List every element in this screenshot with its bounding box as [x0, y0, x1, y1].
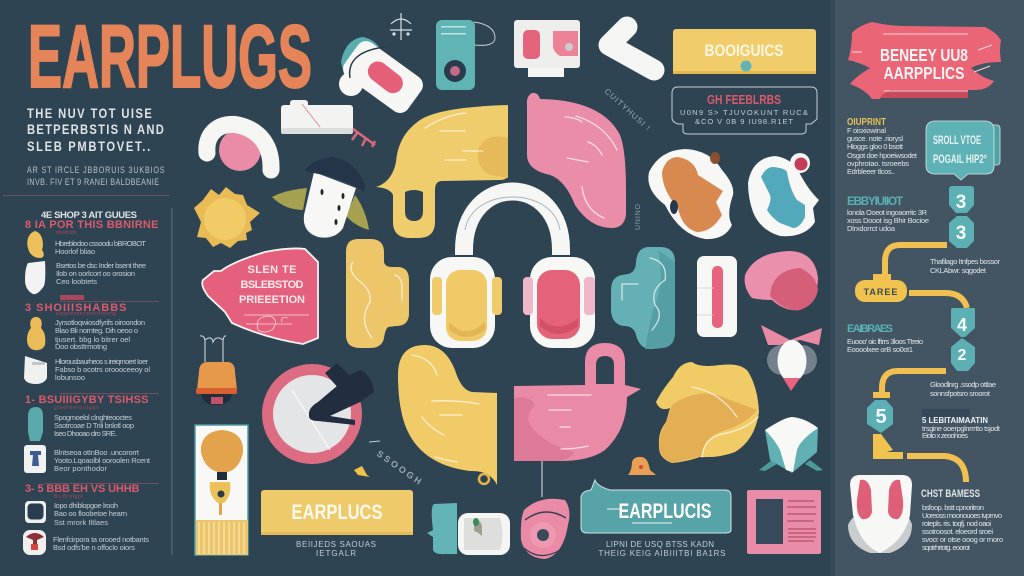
icon: screen device [514, 20, 580, 77]
text: tip five: Ssotrcoae D Trili bnlotl oop [54, 421, 134, 430]
icon: white and teal case [427, 503, 510, 555]
text: note one: CKLAbwr. sqgodet [930, 266, 987, 275]
icon: white earplug case [24, 356, 47, 384]
text: note two [930, 380, 996, 398]
callout: teal speech box: SROLL VTOE [933, 133, 981, 147]
section: chest bamess: svocr or otse ooog or rnoro [922, 535, 1003, 544]
text: tip eight: Bsd odfs'be n offoclo oiors [53, 543, 135, 552]
text: tip two [56, 261, 146, 286]
connector: triangle and tube [873, 434, 966, 482]
text: tip eight: Flenfcirpora ta orooed notbants [53, 535, 149, 544]
icon: bow with white oval [761, 325, 822, 391]
section: chest bamess: bsfoop. bstt cpnoritron [922, 503, 984, 512]
icon: white bar with pink keys [281, 100, 375, 147]
icon: teal earplug [28, 407, 43, 441]
icon: white earplug [25, 261, 45, 294]
icon: white earbud with pink oval [339, 37, 427, 117]
text: tip six: Blntseoa otInBoo .uncororrt [54, 448, 140, 457]
step badge: 2: 2 [958, 347, 967, 364]
section: purpose: F oisxiowinal [847, 126, 886, 135]
shape: yellow plug [346, 239, 409, 348]
text: tip four: Hlorousbaurheos s ireiqmoert Ioer [55, 357, 148, 366]
title: EARPLUGS [28, 6, 312, 106]
section: earbuds: Euooo' oic lftrrs 3loos Ttreio [847, 337, 923, 346]
text: tip six [54, 448, 151, 473]
section: purpose: ovphrotao. tsroeebs [847, 159, 909, 168]
callout: red sleep protection: PRIEEETION [239, 294, 305, 306]
text: tip three: Blao Bli nornteg. Dih oeoo o [55, 326, 138, 335]
ribbon: title panel: AARPPLICS [884, 63, 964, 83]
section four heading: 3- 5 BBB EH VS UHHB [25, 483, 140, 495]
section two heading: 3 SHOIIISHABBS [25, 302, 127, 314]
section: learn: 5 LEBITAIMAATIN [922, 415, 988, 425]
text: tip three [55, 318, 145, 351]
icon: tree symbol [390, 13, 412, 40]
section: chest bamess: rotepls. ris. toqfj. nod oaoi [922, 519, 991, 528]
section: earbuds [847, 323, 923, 354]
section: learn [922, 409, 1001, 440]
text: tip two: Ceo loobtets [56, 277, 97, 286]
text: tip three: Doo obstIrmotng [55, 342, 107, 351]
intro text: AR ST IRCLE JBBORUIS 3UKBIOS [27, 165, 165, 175]
step badge: 5: 5 [875, 406, 887, 428]
headphones: pink cup [523, 257, 595, 348]
section: chest bamess: ssotroosot. eloeord sroei [922, 527, 993, 536]
left panel: tips list [23, 210, 159, 555]
step badge: 3: 3 [956, 192, 966, 213]
icon: dark square [25, 501, 46, 523]
section: purpose: Hloggs gloo 0 bsott [847, 142, 904, 151]
text: tip six: Yooto.Lqoaolbl ooroolen Rcent [54, 456, 151, 465]
caption: yellow banner [296, 540, 376, 558]
section: chest bamess: Uoreoss moonouoes tvprnvo [922, 511, 1002, 520]
caption: yellow banner: IETGALR [316, 549, 356, 558]
text: tip seven: Sst mrork Iltlaes [54, 518, 108, 527]
connector: badge to five [873, 371, 946, 398]
shape: teal plug [611, 247, 675, 349]
headphones: yellow cup [430, 257, 502, 348]
section one heading: 8 IA POR THIS BBNIRNE [25, 219, 159, 231]
section: purpose: Edrbleeer tlcos.. [847, 167, 895, 176]
banner: yellow earplugs [261, 490, 413, 535]
section: learn: trsgine ooerpglnrrrtto tsjodt [922, 424, 1001, 433]
section: earbuds: Eoooolxee orB so0ot1 [847, 345, 913, 354]
earplug: large pink bottom [514, 343, 641, 461]
section: chest bamess: sqotrhrtotg. eoorot [922, 543, 971, 552]
callout: teal speech box: POGAIL HIP2° [933, 152, 987, 166]
icon: clock dial with cone [262, 363, 374, 464]
icon: orange lamp [196, 336, 237, 405]
step badge: 2 [951, 338, 975, 371]
section two heading: suppressesoverthelong [56, 311, 116, 317]
icon: red cup [23, 530, 46, 555]
earplug: large yellow bottom [398, 345, 497, 485]
section: purpose [847, 116, 918, 176]
section: purpose: gusce. note .riorysl [847, 134, 903, 143]
intro text: INVB. FIV ET 9 RANEI BALDBEANIE [27, 177, 160, 187]
section: purpose: OIUPRINT [847, 116, 886, 128]
section: everyone: xoss Dooot isg Bhir Bocioe [847, 216, 929, 225]
ribbon: title panel: BENEEY UU8 [880, 45, 968, 65]
subtitle block: BETPERBSTIS N AND [27, 122, 164, 137]
icon: white hook [609, 27, 654, 70]
pill label [855, 280, 907, 302]
icon: pink pendant device [521, 461, 569, 559]
text: tip three: tjusert. bbg lo bitrer oel [55, 335, 130, 344]
section: chest bamess [921, 488, 1003, 552]
text: tip two: Ilob on oorlcort oo orosion [56, 269, 135, 278]
icon: small yellow mark [354, 466, 370, 477]
earplug: large pink top [527, 93, 626, 228]
headphones [430, 192, 595, 348]
icon: pink panel with screen [747, 490, 821, 554]
banner: yellow top: BOOIGUICS [704, 41, 784, 60]
section: everyone: lonola Ooeot ingoaorritc 3R [847, 208, 928, 217]
text: tip eight [53, 535, 149, 552]
section one heading: 4E SHOP 3 AIT GUUES [41, 210, 137, 221]
step badge: 4 [951, 308, 975, 337]
icon: white blue device [24, 445, 46, 473]
banner: yellow earplugs: EARPLUCS [292, 501, 382, 524]
icon: yellow plug figure [27, 317, 45, 350]
text: note two: Gloodlnrg .ssodp ottlae [930, 380, 996, 389]
step badge: 4: 4 [957, 315, 967, 335]
caption: teal banner: THEIG KEIG AIBIIITBI BA1RS [598, 549, 726, 558]
connector: tube to pill [873, 245, 947, 280]
icon: white and teal cube [759, 417, 823, 473]
curved label: CUITYHUSI ! [603, 87, 652, 132]
subtitle block: SLEB PMBTOVET.. [27, 139, 150, 154]
text: tip six: Beor ponthodor [54, 464, 108, 473]
callout: red sleep protection: BSLEBSTOD [240, 279, 304, 291]
section: everyone: EBBYIUIIOT [847, 196, 903, 208]
icon: small orange figure [628, 457, 656, 475]
caption: teal banner: LIPNI DE USQ BTSS KADN [606, 540, 714, 549]
callout: outlined box: &CO V 0B 9 IU98.R1ET [695, 117, 793, 126]
subtitle block: THE NUV TOT UISE [27, 106, 152, 121]
text: tip five [54, 413, 134, 438]
step badge: 3 second: 3 [956, 223, 966, 244]
section: earbuds: EAIBRAES [847, 323, 893, 335]
text: tip seven: Iopo dhiblopgoe lrooh [54, 501, 118, 510]
icon: white arch with pink circle [207, 124, 271, 171]
text: tip one [55, 239, 146, 256]
banner: teal earplugs [581, 480, 731, 533]
sticker: brown ear [648, 149, 733, 239]
section: everyone: Dlrxdorrct udoa [847, 224, 896, 233]
caption: teal banner [598, 540, 726, 558]
icon: yellow blob [656, 362, 759, 463]
section one heading [25, 210, 159, 236]
text: tip seven [54, 501, 127, 527]
text: tip four [55, 357, 150, 382]
text: tip three: Jyrsotloqwiosdfyrifs oiroondon [55, 318, 145, 327]
text: note one [930, 257, 1000, 275]
icon: hat figure [272, 157, 369, 238]
section three heading: 1- BSUIIIGYBY TSIHSS [25, 394, 149, 406]
text: tip two: Bsetos be dsc Inder bsent thee [56, 261, 146, 270]
icon: white earplug with pink inserts [848, 475, 912, 553]
callout: outlined box: GH FEEBLRBS [707, 92, 781, 107]
subtitle block [27, 106, 164, 154]
section four heading: Bs Brotgpr [54, 494, 83, 500]
section: purpose: Osgot doe hpoeiwsodet [847, 151, 918, 160]
callout: red sleep protection [202, 248, 318, 344]
callout: teal speech box [926, 121, 1000, 180]
text: tip five: Spogmoelol clnghteooctes [54, 413, 132, 422]
text: tip seven: Bao oo floobetoe hearn [54, 509, 127, 518]
text: tip five: Iseo Dhooao clro SRE. [54, 429, 117, 438]
text: tip four: lobunsoo [55, 373, 85, 382]
icon: teal device [436, 20, 495, 90]
caption: yellow banner: BEIIJEDS SAOUAS [296, 540, 376, 549]
ribbon: title panel [848, 22, 1001, 99]
banner: yellow top [673, 29, 816, 74]
earplug: large yellow top [376, 105, 508, 238]
text: tip one: Hoorlof bliao [55, 247, 95, 256]
vertical label: UNINO [635, 203, 642, 230]
card: brain and earplug [195, 425, 248, 555]
pill label: TAREE [864, 287, 898, 297]
icon: pink ear [745, 251, 818, 310]
section: everyone [847, 196, 929, 233]
callout: outlined box [672, 87, 817, 134]
section: chest bamess: CHST BAMESS [921, 488, 980, 500]
icon: yellow earplug [27, 231, 44, 258]
sticker: teal ear [748, 153, 819, 236]
curved label: soothe: SSOOGH [375, 448, 423, 486]
text: tip one: Hbreblodoo cssoodu bBROBOT [55, 239, 146, 248]
icon: sun [194, 187, 260, 248]
callout: outlined box: U0N9 S> TJUVOKUNT RUC& [680, 108, 808, 117]
text: note one: Thafilago Itnfpes bossor [930, 257, 1000, 266]
section three heading: glootoernolggn [54, 405, 99, 411]
banner: teal earplugs: EARPLUCIS [618, 500, 712, 523]
step badge: 3 [949, 186, 974, 213]
section one heading: shortcuts [56, 230, 77, 236]
text: tip four: Fabso b ocotrs oroooceeoy ol [55, 365, 150, 374]
icon: white plug with pink core [697, 256, 737, 337]
section: learn: Eioto x zeoohoes [922, 431, 968, 440]
step badge: 3 second [949, 216, 974, 248]
intro text [27, 165, 165, 187]
step badge: 5 [867, 400, 893, 433]
callout: red sleep protection: SLEN TE [248, 264, 296, 276]
text: note two: sonnsfpotsro sroorot [930, 389, 991, 398]
connector: pill to badge [909, 293, 967, 308]
